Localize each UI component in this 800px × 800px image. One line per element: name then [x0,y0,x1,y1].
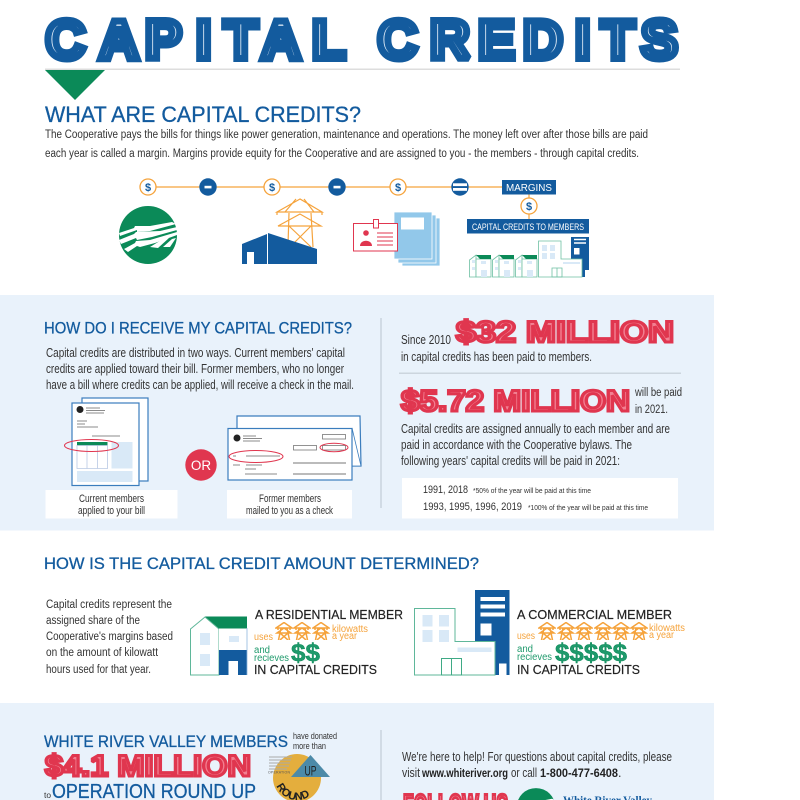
body text: credits are applied toward their bill. Former members, who no longer [46,362,344,376]
stat: 4.1 million: $4.1 MILLION [45,750,251,783]
or badge [185,449,217,481]
explanation text: assigned share of the [46,615,140,627]
dollar node [390,179,406,195]
icon: power plant and transmission tower [242,199,322,264]
connector line [148,187,529,226]
icon: cooperative logo [119,206,177,264]
title: CAPITALCREDITS [46,8,678,70]
body text [46,346,354,392]
stat: 5.72 million: will be paid [634,387,682,399]
have donated text [293,731,337,752]
icon: member homes and business [470,237,589,277]
green triangle marker [45,70,105,100]
stat: 32 million [401,316,674,364]
body text: Capital credits are assigned annually to each member and are [401,422,670,436]
icon: operation round up logo: OPERATION [268,770,290,774]
section: what are capital credits [45,102,648,160]
have donated text: have donated [293,731,337,742]
contact text: We're here to help! For questions about capital credits, please [402,750,672,764]
body text: paid in accordance with the Cooperative bylaws. The [401,438,632,452]
icon: commercial building [414,590,510,675]
stat: 32 million: in capital credits has been paid to members. [401,350,592,364]
residential member text: recieves [254,653,289,664]
commercial member text: a year [649,630,675,641]
caption: current members: applied to your bill [78,505,145,517]
stat: 32 million: Since 2010 [401,333,451,347]
residential member text: kilowatts [332,624,368,635]
heading: HOW IS THE CAPITAL CREDIT AMOUNT DETERMINED? [44,555,479,573]
section: how is the amount determined [44,555,685,677]
explanation text [46,599,173,676]
contact text: www.whiteriver.org [421,768,508,780]
icon: bill [64,398,148,486]
capital credits to members box: CAPITAL CREDITS TO MEMBERS [472,222,584,232]
heading: WHAT ARE CAPITAL CREDITS? [45,102,361,127]
have donated text: more than [293,741,326,752]
commercial member text: IN CAPITAL CREDITS [517,662,640,677]
years list: 1993, 1995, 1996, 2019 [423,501,522,513]
icon: towers [276,622,329,640]
dollar node [521,198,537,214]
commercial member text: and [517,644,533,655]
explanation text: on the amount of kilowatt [46,647,159,659]
icon: towers [539,622,647,640]
explanation text: Capital credits represent the [46,599,172,611]
minus node [199,178,217,196]
residential member text: IN CAPITAL CREDITS [254,662,377,677]
stat: 5.72 million: in 2021. [635,404,668,416]
contact text [402,750,672,780]
residential member text: and [254,645,270,656]
caption: current members: Current members [79,493,144,505]
stat: 32 million: $32 MILLION [456,316,674,349]
or badge: OR [191,458,211,473]
body text [401,422,670,468]
contact text: . [618,766,621,780]
commercial member text: A COMMERCIAL MEMBER [517,607,672,622]
caption: former members [227,490,352,518]
dollar node: $ [145,182,151,194]
dollar node [140,179,156,195]
equals node [451,178,469,196]
dollar node: $ [269,182,275,194]
icon: residential house [190,616,247,675]
years list: *50% of the year will be paid at this time [473,488,591,495]
residential member text: $$ [291,639,320,667]
icon: badge and documents [354,212,440,266]
operation round up text: to [44,791,52,800]
years list [402,478,678,518]
panel: how do I receive [0,295,714,530]
commercial member text: uses [517,631,535,642]
residential member text [254,607,403,677]
contact text: visit [402,766,420,780]
explanation text: Cooperative's margins based [46,631,173,643]
contact text: 1-800-477-6408 [540,768,619,780]
residential member text: a year [332,631,358,642]
residential member text: uses [254,632,273,643]
caption: former members: Former members [259,493,321,505]
capital credits to members box [467,219,589,234]
commercial member text [517,607,685,677]
dollar node: $ [395,182,401,194]
years list: 1991, 2018 [423,484,468,496]
flow diagram [119,178,589,277]
icon: operation round up logo: UP [304,762,316,778]
body text: have a bill where credits can be applied, will receive a check in the mail. [46,378,354,392]
residential member text: A RESIDENTIAL MEMBER [255,607,403,622]
commercial member text: recieves [517,652,552,663]
intro text: The Cooperative pays the bills for things like power generation, maintenance and operations. The money left over after those bills are paid [45,129,648,141]
dollar node: $ [526,201,532,213]
body text: following years' capital credits will be paid in 2021: [401,454,620,468]
contact text: or call [511,766,537,780]
icon: operation round up logo [268,754,330,800]
panel: donations and contact [0,703,714,800]
icon: small cooperative logo [517,788,555,800]
heading: HOW DO I RECEIVE MY CAPITAL CREDITS? [44,320,352,338]
caption: former members: mailed to you as a check [246,505,333,517]
intro text [45,129,648,160]
dollar node [264,179,280,195]
minus node [328,178,346,196]
body text: Capital credits are distributed in two ways. Current members' capital [46,346,345,360]
margins box: MARGINS [506,182,552,194]
years list: *100% of the year will be paid at this time [528,505,648,512]
white river valley members heading: WHITE RIVER VALLEY MEMBERS [44,733,288,751]
commercial member text: $$$$$ [555,639,627,667]
caption: current members [46,490,178,518]
icon: check [228,416,361,480]
intro text: each year is called a margin. Margins provide equity for the Cooperative and are assigned to you - the members - through capital credits. [45,148,639,160]
explanation text: hours used for that year. [46,664,151,676]
commercial member text: kilowatts [649,623,685,634]
stat: 5.72 million: $5.72 MILLION [401,385,630,418]
